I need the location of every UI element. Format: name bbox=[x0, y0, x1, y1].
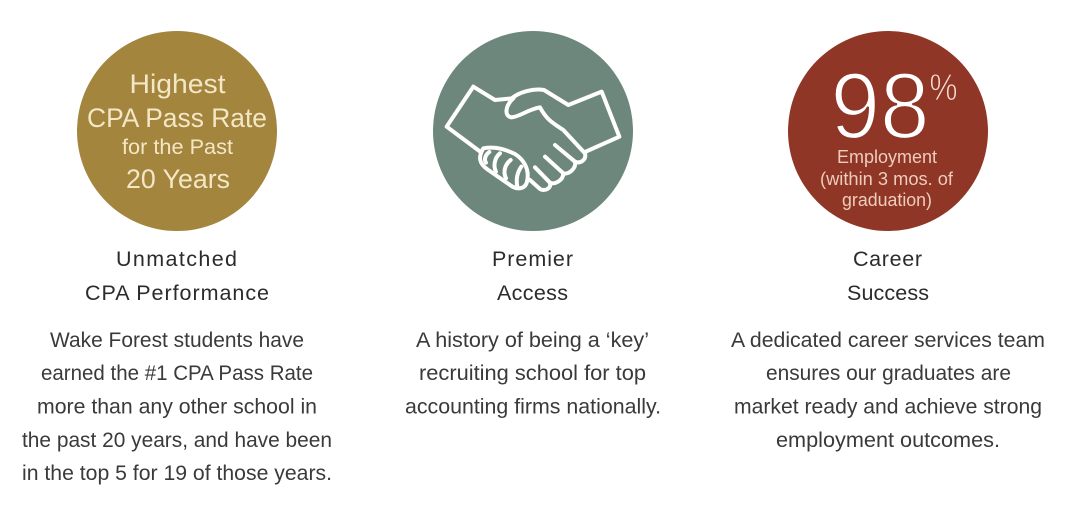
text block: career description bbox=[731, 329, 1045, 452]
heading: Unmatched CPA Performance bbox=[85, 247, 269, 305]
gold badge: Highest bbox=[130, 69, 226, 99]
text block: access description bbox=[405, 329, 661, 418]
heading: Unmatched CPA Performance: Unmatched bbox=[116, 247, 237, 271]
red badge: graduation) bbox=[842, 190, 932, 210]
panel: premier access bbox=[405, 31, 661, 418]
heading: Career Success: Career bbox=[853, 247, 922, 271]
red badge: Employment bbox=[837, 147, 937, 167]
heading: Career Success bbox=[847, 247, 929, 305]
text block: career description: market ready and achieve strong bbox=[734, 396, 1042, 418]
text block: CPA description: earned the #1 CPA Pass Rate bbox=[41, 362, 313, 385]
text block: career description: A dedicated career services team bbox=[731, 329, 1045, 352]
text block: CPA description: the past 20 years, and have been bbox=[22, 429, 332, 452]
text block: CPA description bbox=[22, 329, 332, 485]
panel: career success bbox=[731, 31, 1045, 452]
red badge: % bbox=[930, 67, 958, 108]
heading: Premier Access: Premier bbox=[492, 247, 573, 271]
icon: handshake badge bbox=[433, 31, 633, 231]
red badge bbox=[788, 31, 988, 231]
heading: Career Success: Success bbox=[847, 281, 929, 305]
panel: CPA performance bbox=[22, 31, 332, 485]
gold badge: 20 Years bbox=[126, 164, 230, 194]
text block: access description: A history of being a ‘key’ bbox=[416, 329, 649, 352]
text block: access description: recruiting school for top bbox=[419, 362, 646, 385]
heading: Unmatched CPA Performance: CPA Performance bbox=[85, 281, 269, 305]
text block: career description: employment outcomes. bbox=[776, 429, 1000, 452]
gold badge: CPA Pass Rate bbox=[87, 103, 267, 133]
heading: Premier Access bbox=[492, 247, 573, 305]
text block: access description: accounting firms nationally. bbox=[405, 396, 661, 418]
red badge: 98 bbox=[830, 53, 930, 158]
red badge: (within 3 mos. of bbox=[820, 169, 954, 189]
gold badge bbox=[77, 31, 277, 231]
text block: CPA description: more than any other school in bbox=[37, 396, 317, 418]
text block: career description: ensures our graduates are bbox=[766, 362, 1011, 385]
text block: CPA description: in the top 5 for 19 of those years. bbox=[22, 462, 332, 485]
text block: CPA description: Wake Forest students have bbox=[50, 329, 304, 352]
gold badge: for the Past bbox=[122, 136, 233, 159]
heading: Premier Access: Access bbox=[497, 281, 568, 305]
